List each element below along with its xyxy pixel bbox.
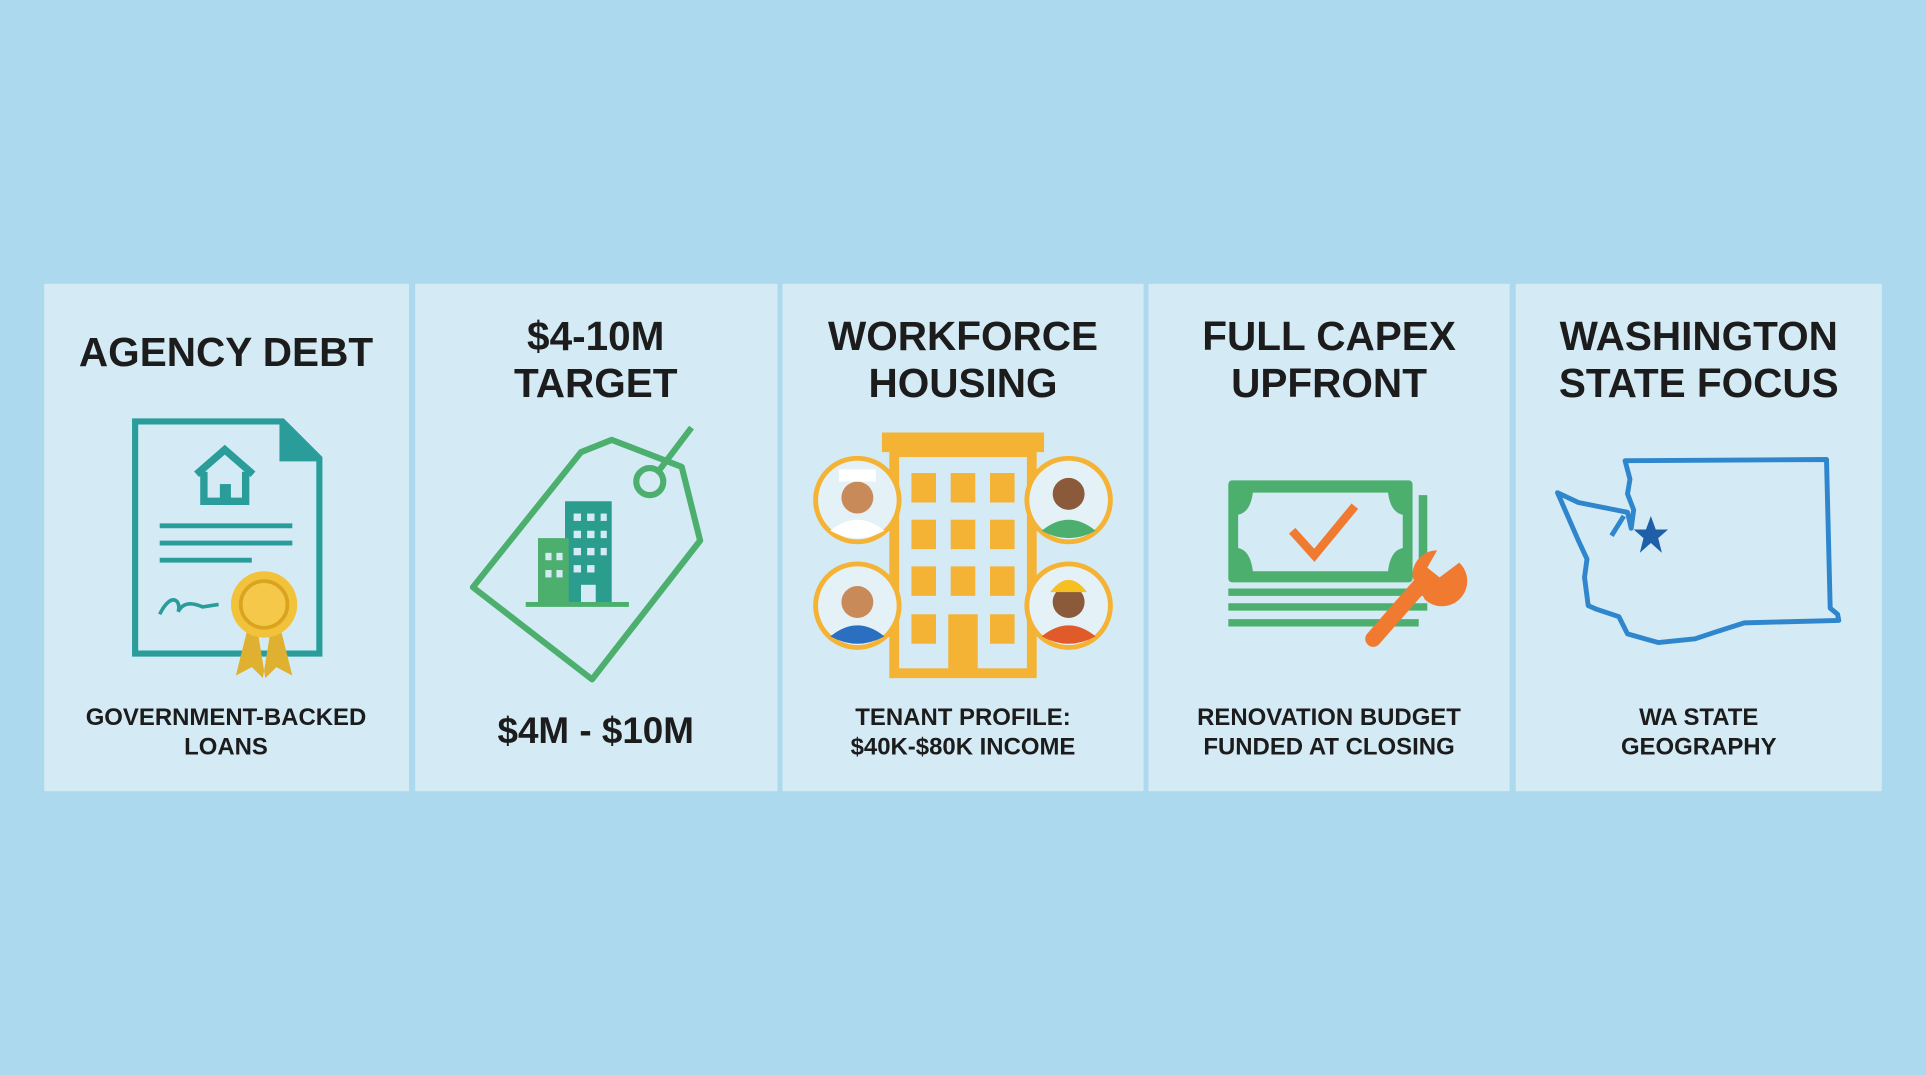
heading: $4-10M target: $4-10M — [527, 313, 664, 359]
icon: loan document — [135, 421, 319, 654]
heading: workforce housing: WORKFORCE — [828, 313, 1098, 359]
heading: full capex upfront: FULL CAPEX — [1202, 313, 1456, 359]
panel: washington state: GEOGRAPHY — [1621, 733, 1777, 760]
text: government-backed loans: GOVERNMENT-BACKED — [86, 704, 366, 731]
panel: agency debt: LOANS — [184, 733, 268, 760]
panel: full capex: UPFRONT — [1231, 360, 1427, 406]
icon: building — [526, 501, 629, 607]
panel: workforce housing: $40K-$80K INCOME — [851, 733, 1075, 760]
heading: agency debt: AGENCY DEBT — [79, 329, 373, 375]
text: renovation budget: RENOVATION BUDGET — [1197, 704, 1461, 731]
icon: worker portraits — [816, 458, 1110, 647]
heading: washington state focus: WASHINGTON — [1560, 313, 1838, 359]
panel: workforce housing: HOUSING — [868, 360, 1058, 406]
panel: target — [415, 284, 778, 791]
icon: WA map — [1558, 460, 1839, 643]
panel: workforce housing — [782, 284, 1144, 791]
icon: star — [1634, 516, 1668, 553]
panel: washington state: STATE FOCUS — [1559, 360, 1839, 406]
panel: agency debt — [44, 284, 409, 791]
icon: seal — [231, 571, 297, 678]
icon: wrench — [1373, 550, 1467, 639]
text: WA state geography: WA STATE — [1639, 704, 1758, 731]
panel: full capex — [1148, 284, 1510, 791]
panel: full capex: FUNDED AT CLOSING — [1203, 733, 1455, 760]
text: $4M - $10M: $4M - $10M — [497, 710, 694, 751]
icon: price tag — [473, 428, 700, 679]
icon: money with check — [1228, 480, 1437, 623]
panel: target: TARGET — [514, 360, 678, 406]
panel: washington state — [1516, 284, 1882, 791]
icon: apartment building — [882, 432, 1044, 673]
text: tenant profile: TENANT PROFILE: — [855, 704, 1071, 731]
